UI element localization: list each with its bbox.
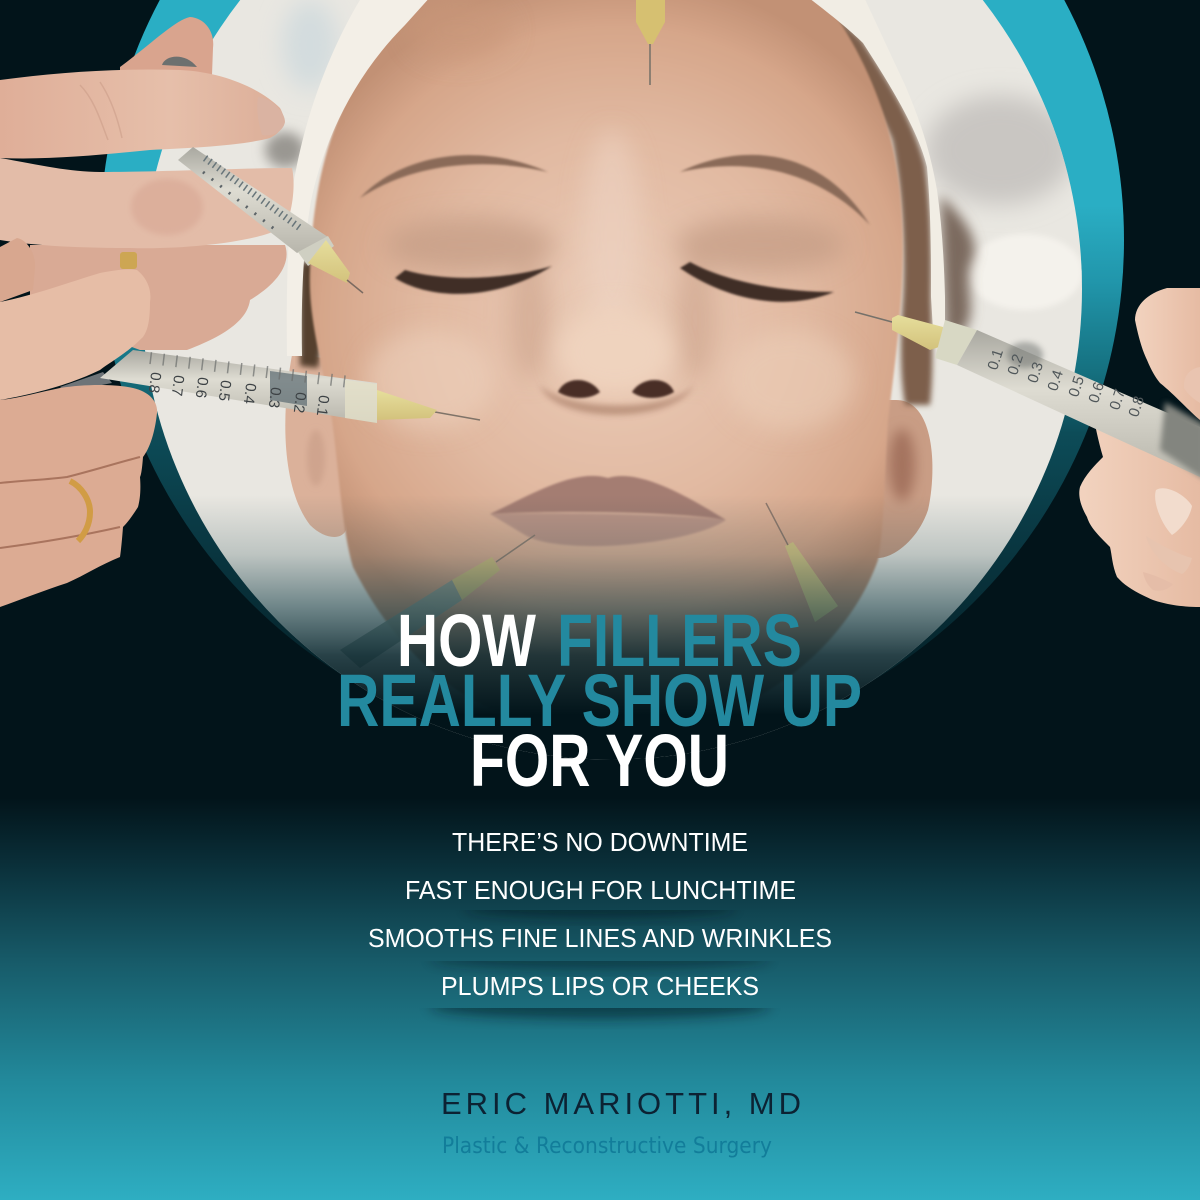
fingernail	[257, 97, 285, 135]
hair outside headband	[940, 195, 975, 335]
fingernail small	[1143, 572, 1173, 591]
scale numbers	[984, 347, 1148, 419]
lower fingers	[1079, 413, 1200, 607]
scale numbers: 0.8	[145, 371, 164, 394]
upper lip	[490, 476, 726, 520]
benefit 4: PLUMPS LIPS OR CHEEKS	[441, 971, 759, 1001]
hub	[308, 240, 350, 283]
ear: right	[877, 400, 932, 558]
small finger left	[0, 238, 35, 302]
right hand	[855, 288, 1200, 607]
under nose shadow	[540, 385, 694, 415]
scale dots	[203, 172, 278, 232]
nose tip	[558, 325, 675, 392]
title line 1	[397, 599, 802, 682]
scale numbers: 0.6	[192, 376, 211, 399]
hub base	[935, 320, 977, 365]
index finger	[0, 69, 284, 158]
logo	[441, 1086, 801, 1159]
syringe: top centre	[636, 0, 665, 85]
benefit 2: FAST ENOUGH FOR LUNCHTIME	[405, 875, 796, 905]
benefit 3: SMOOTHS FINE LINES AND WRINKLES	[368, 923, 832, 953]
ring top	[120, 252, 137, 269]
barrel dark end	[1160, 402, 1200, 480]
scale numbers: 0.2	[290, 391, 309, 414]
benefit 1: THERE’S NO DOWNTIME	[452, 827, 748, 857]
barrel	[178, 147, 328, 253]
lower fingers	[0, 385, 157, 607]
needle	[435, 412, 480, 420]
scale numbers: 0.7	[1106, 387, 1129, 412]
logo name: ERIC MARIOTTI, MD	[441, 1086, 801, 1121]
benefits list	[368, 827, 832, 1001]
barrel	[340, 580, 462, 668]
scale numbers: 0.4	[1044, 368, 1067, 393]
hair inside headband	[837, 20, 937, 410]
photo: woman's face	[130, 0, 1090, 795]
hub	[377, 390, 437, 420]
fingernail lower	[1146, 536, 1192, 574]
plunger end	[60, 372, 112, 392]
scale numbers: 0.2	[1004, 352, 1027, 377]
title line 3: FOR YOU	[470, 719, 729, 802]
eyebrow: right	[680, 155, 870, 225]
scale numbers	[145, 371, 332, 417]
thumb	[1135, 288, 1200, 420]
syringe: lower left	[60, 350, 480, 423]
syringe end behind finger	[162, 57, 197, 67]
dark reflections	[1007, 342, 1043, 368]
fingernail middle	[1155, 488, 1192, 535]
towel shading	[265, 0, 1083, 335]
fade at bottom of photo	[195, 506, 1028, 760]
hub	[892, 315, 945, 350]
scale numbers: 0.5	[1065, 374, 1088, 399]
needle	[496, 535, 535, 562]
face shading	[362, 134, 856, 431]
hub base	[345, 380, 377, 423]
scale numbers: 0.4	[240, 382, 259, 405]
hub	[452, 557, 500, 600]
needle	[347, 280, 363, 293]
scale numbers: 0.7	[168, 374, 187, 397]
barrel	[100, 350, 377, 423]
title line 1: FILLERS	[557, 599, 802, 682]
closed eye: left	[395, 266, 552, 294]
eyebrow: left	[360, 155, 548, 198]
thumb	[0, 269, 150, 400]
syringe: bottom left	[340, 535, 535, 668]
needle	[855, 312, 892, 322]
lips	[490, 476, 726, 546]
logo tagline: Plastic & Reconstructive Surgery	[442, 1134, 772, 1159]
scale numbers: 0.3	[265, 386, 284, 409]
left hands	[0, 17, 480, 607]
scale numbers: 0.8	[1125, 394, 1148, 419]
ear: left	[285, 355, 346, 537]
middle finger	[0, 158, 294, 248]
title line 1: HOW	[397, 599, 536, 682]
fingertip behind	[120, 17, 213, 80]
hub	[785, 542, 838, 622]
hair: left side	[300, 262, 325, 368]
scale numbers: 0.3	[1024, 360, 1047, 385]
knuckle lines	[80, 82, 122, 140]
title	[337, 599, 862, 802]
title line 2: REALLY SHOW UP	[337, 659, 862, 742]
lower lip	[490, 513, 726, 546]
wedding ring	[70, 481, 90, 541]
thumbnail	[1184, 367, 1200, 403]
hub base	[298, 236, 334, 266]
nostril: left	[558, 380, 600, 398]
list shadows	[430, 898, 770, 1019]
scale numbers: 0.1	[984, 347, 1007, 372]
needle	[649, 40, 651, 85]
right headband	[805, 0, 945, 330]
towel background	[130, 0, 1090, 770]
needle	[766, 503, 788, 545]
nostril: right	[632, 380, 674, 398]
dark band	[270, 371, 307, 406]
syringe: right	[855, 312, 1200, 480]
syringe: upper left	[178, 147, 363, 293]
scale numbers: 0.5	[215, 379, 234, 402]
syringe: bottom right	[766, 503, 838, 622]
third finger	[30, 245, 287, 350]
closed eye: right	[680, 262, 834, 302]
scale numbers: 0.1	[313, 394, 332, 417]
scale numbers: 0.6	[1085, 380, 1108, 405]
face	[310, 0, 903, 735]
nose	[540, 325, 692, 418]
ticks	[150, 358, 350, 382]
knuckle	[131, 179, 203, 235]
teal circle behind photo	[100, 0, 1124, 752]
finger creases	[0, 457, 140, 548]
barrel	[957, 330, 1200, 477]
left headband	[287, 0, 432, 356]
hub	[636, 0, 665, 44]
